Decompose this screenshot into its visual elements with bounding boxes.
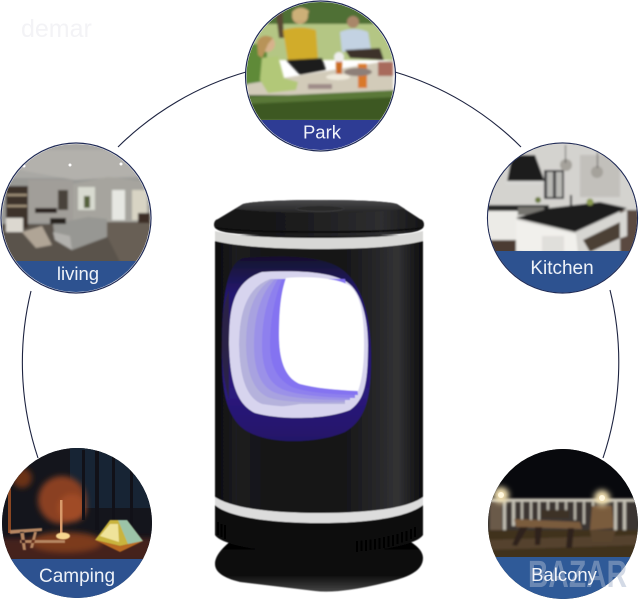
- panel: kitchen circle: [487, 143, 639, 295]
- lower white band: [215, 497, 423, 523]
- connector: kitchen to balcony arc: [603, 290, 619, 458]
- kitchen photo: [487, 143, 639, 295]
- kitchen label banner: [496, 251, 630, 292]
- balcony label: Balcony: [531, 564, 598, 585]
- connector: park to kitchen arc: [395, 72, 521, 147]
- panel: camping circle: [0, 448, 154, 600]
- lamp lower section: [215, 500, 423, 553]
- power button: [296, 206, 344, 212]
- park photo: [245, 0, 396, 153]
- park label: Park: [303, 122, 342, 142]
- camping photo: [0, 448, 154, 600]
- balcony label banner: [496, 557, 630, 599]
- window: light frame: [229, 271, 368, 418]
- kitchen label: Kitchen: [530, 258, 594, 279]
- vent slots left: [218, 522, 225, 539]
- living label banner: [16, 261, 136, 292]
- vent slots right: [357, 527, 415, 552]
- window: purple glow recess: [222, 256, 371, 441]
- living label: living: [57, 263, 99, 284]
- product: mosquito lamp: [214, 200, 424, 592]
- panel: balcony circle: [487, 449, 639, 600]
- connector: living to camping arc: [22, 291, 38, 458]
- lamp base: [215, 538, 423, 592]
- watermark: demar: demar: [21, 15, 92, 43]
- panel: park circle: [245, 0, 396, 153]
- park label banner: [261, 120, 380, 150]
- camping label banner: [11, 559, 143, 598]
- living room photo: [0, 143, 152, 295]
- lamp main body: [215, 235, 423, 522]
- window: bright opening: [279, 277, 364, 391]
- lamp top cap: [214, 200, 424, 236]
- camping label: Camping: [39, 566, 115, 587]
- window: concentric purple stripes: [239, 279, 358, 407]
- balcony photo: [487, 449, 639, 600]
- panel: living circle: [0, 143, 152, 295]
- tent: [95, 520, 143, 552]
- connector: park to living arc: [118, 72, 246, 147]
- upper white band: [215, 231, 423, 249]
